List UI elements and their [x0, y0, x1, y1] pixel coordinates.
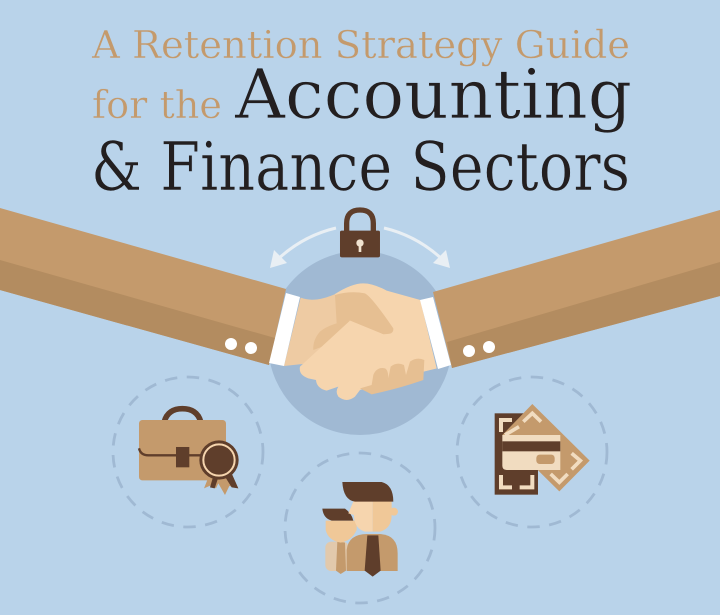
right arm	[433, 210, 720, 368]
title	[91, 23, 632, 206]
right cuff	[420, 297, 451, 369]
left arrow	[270, 228, 336, 268]
title: & Finance Sectors	[91, 128, 630, 206]
title: A Retention Strategy Guide	[91, 23, 630, 68]
title: Accounting	[234, 56, 632, 135]
backdrop circle	[268, 251, 452, 435]
right arrow	[384, 228, 450, 268]
icon: banknote and credit card	[495, 404, 590, 495]
dashed circle: left	[113, 377, 263, 527]
dashed circle: right	[457, 377, 607, 527]
left arm	[0, 208, 286, 365]
dashed circle: middle	[285, 453, 435, 603]
handshake	[284, 283, 437, 400]
title: for the	[92, 83, 222, 128]
padlock icon	[340, 210, 380, 257]
icon: briefcase with rosette	[139, 409, 239, 495]
icon: two businessmen	[322, 482, 398, 577]
left cuff	[269, 293, 300, 366]
